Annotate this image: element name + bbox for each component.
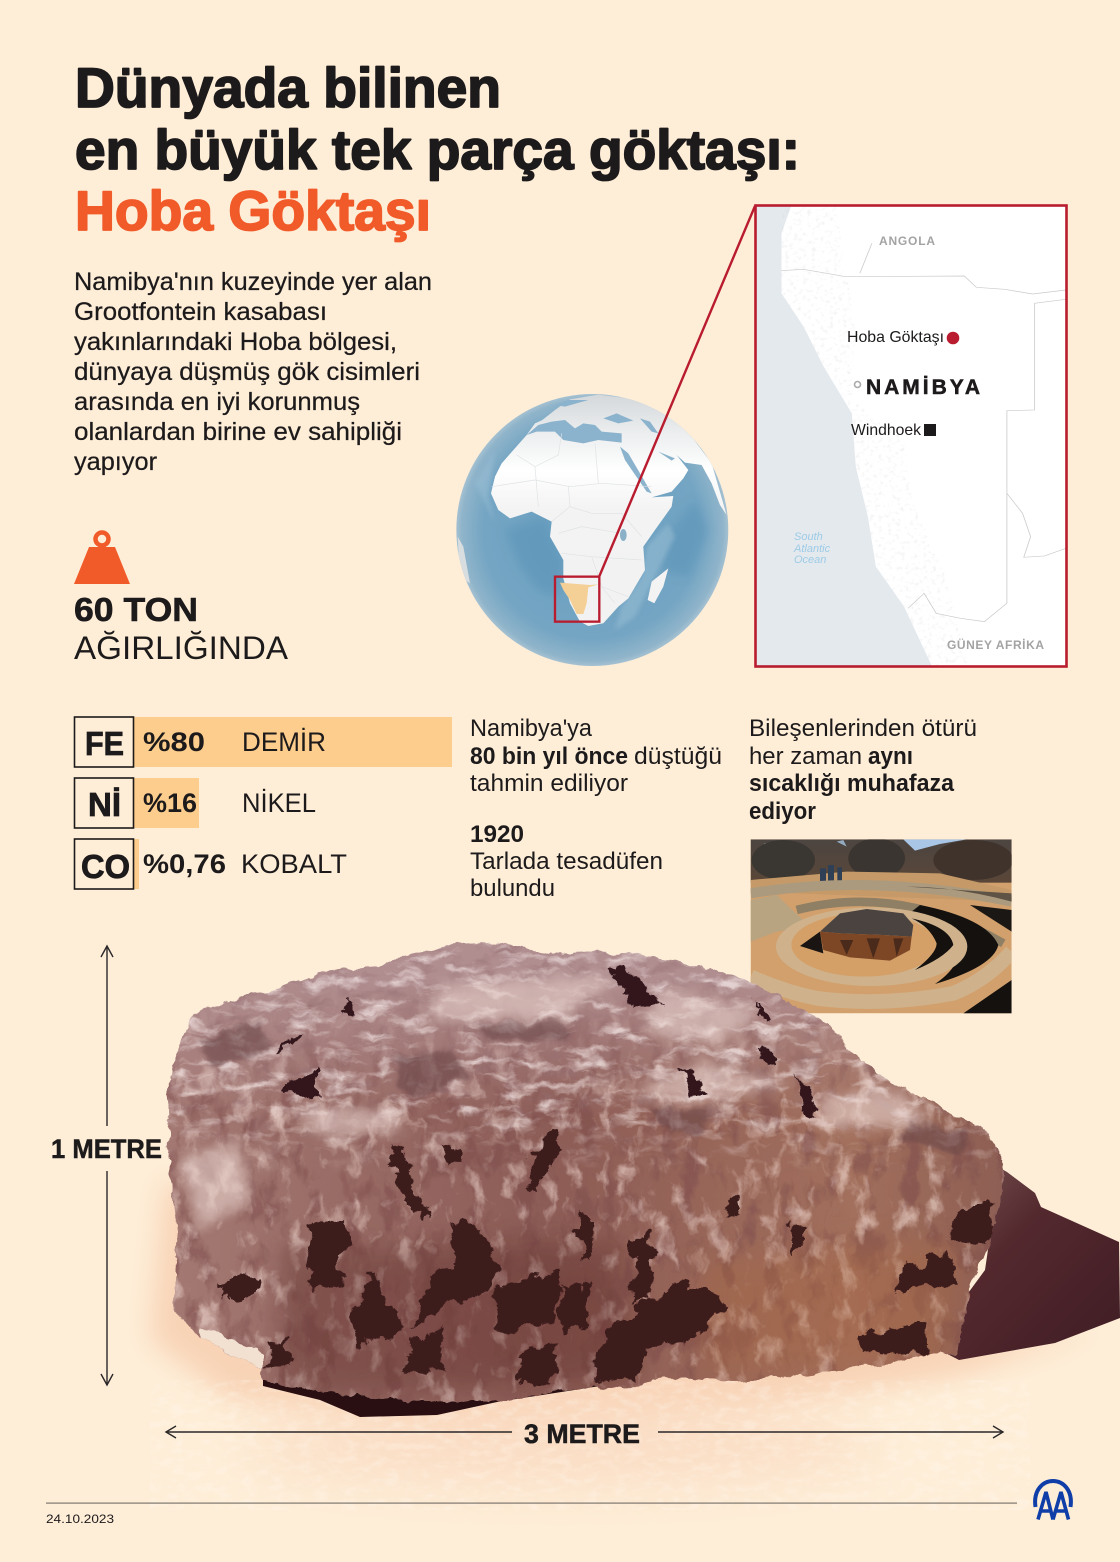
bottom right shadow (963, 980, 1012, 1013)
label: ocean: Atlantic (793, 543, 831, 555)
element box: Ni: Nİ (88, 786, 121, 823)
arrow: width (166, 1426, 1003, 1438)
intro text block: arasında en iyi korunmuş (74, 388, 360, 416)
intro text block: olanlardan birine ev sahipliği (74, 418, 402, 446)
text block: temperature: her zaman (749, 743, 862, 770)
title: Dünyada bilinen (75, 56, 501, 119)
meteorite (165, 942, 1004, 1404)
text block: fall date: Tarlada tesadüfen (470, 848, 663, 875)
date: 24.10.2023 (46, 1512, 114, 1526)
label: ocean (793, 531, 831, 566)
people (820, 865, 842, 882)
element box: CO: CO (81, 848, 130, 885)
inner sand (791, 913, 937, 977)
bright patches (180, 975, 930, 1230)
deep gashes (222, 1128, 990, 1385)
title (75, 56, 800, 242)
element box: FE (74, 717, 134, 767)
sea (755, 205, 932, 667)
bar: iron (133, 717, 452, 767)
text block: fall date: 80 bin yıl önce (470, 743, 628, 770)
steps (750, 895, 802, 942)
icon: weight (74, 532, 130, 584)
element box: CO (74, 839, 134, 889)
connector line (599, 206, 755, 577)
bar: nickel (133, 778, 199, 828)
label: 1 metre: 1 METRE (51, 1134, 162, 1164)
text block: fall date: bulundu (470, 875, 555, 902)
rock side tone (165, 996, 1004, 1404)
element names: DEMİR (242, 726, 326, 757)
intro text block (74, 268, 432, 476)
outer stone wall (751, 885, 1012, 902)
intro text block: dünyaya düşmüş gök cisimleri (74, 358, 420, 386)
dark contact shadow (263, 1370, 600, 1417)
stripe detail (200, 1327, 263, 1372)
shaded lower left (280, 1240, 640, 1400)
percentages: %80 (143, 727, 205, 757)
panel: map of Namibia (755, 205, 1066, 667)
borders (781, 243, 1066, 622)
Madagascar (648, 568, 668, 603)
composition bars (74, 717, 452, 889)
title: en büyük tek parça göktaşı: (75, 118, 800, 181)
arrow: height (101, 946, 113, 1385)
title: Hoba Göktaşı (75, 179, 431, 242)
marker: Windhoek (924, 424, 936, 436)
element names: NİKEL (242, 787, 316, 818)
mottled dark patches (200, 1020, 970, 1155)
label: Namibya: NAMİBYA (866, 376, 980, 399)
weight label: AĞIRLIĞINDA (74, 630, 289, 666)
seas (527, 400, 675, 493)
text block: temperature: aynı (868, 743, 913, 770)
intro text block: Grootfontein kasabası (74, 298, 327, 326)
South America edge (458, 537, 470, 583)
label: 3 metre: 3 METRE (524, 1419, 640, 1449)
intro text block: yapıyor (74, 448, 157, 476)
label: Angola: ANGOLA (879, 234, 935, 248)
element names: KOBALT (241, 849, 347, 879)
meteorite top (820, 909, 913, 937)
text block: fall date: düştüğü (634, 743, 722, 770)
label: Windhoek: Windhoek (851, 422, 922, 439)
trees (751, 839, 1012, 883)
warm lower right (700, 1240, 960, 1380)
top face streaks (166, 942, 998, 1170)
text block: temperature: sıcaklığı muhafaza (749, 770, 955, 797)
ocean shelf shading (475, 450, 675, 630)
text block: fall date: Namibya'ya (470, 715, 593, 742)
marker: Hoba (947, 332, 959, 344)
weight label (74, 591, 289, 666)
text block: temperature (749, 715, 977, 825)
element box: Ni (74, 778, 134, 828)
label: ocean: South (794, 531, 823, 543)
terrain texture (782, 208, 966, 662)
photo: meteorite site (751, 838, 1013, 1013)
text block: fall date (470, 715, 722, 902)
land: Africa and Eurasia (491, 395, 727, 626)
text block: temperature: ediyor (749, 798, 816, 825)
top cracks (273, 972, 820, 1120)
rock shadow on ground (930, 1168, 1120, 1360)
second stone wall (797, 902, 1003, 943)
meteorite side (820, 932, 912, 961)
intro text block: yakınlarındaki Hoba bölgesi, (74, 328, 397, 356)
ocean depth shading (509, 506, 708, 592)
rock shadow (800, 932, 823, 953)
icon: AA logo (1035, 1481, 1071, 1520)
locator box (555, 577, 599, 622)
inner trench (912, 918, 953, 970)
element names (241, 726, 347, 879)
text block: fall date: 1920 (470, 821, 524, 848)
outer paved ring (751, 952, 1012, 1002)
outer trench (912, 905, 998, 984)
Namibia highlight (560, 583, 598, 614)
middle paved ring (776, 907, 967, 986)
lake (620, 529, 627, 541)
side face texture (166, 1005, 1004, 1403)
percentages: %16 (143, 788, 197, 818)
intro text block: Namibya'nın kuzeyinde yer alan (74, 268, 432, 296)
sand ground (150, 1180, 1100, 1510)
label: Hoba: Hoba Göktaşı (847, 329, 944, 346)
percentages: %0,76 (143, 849, 226, 879)
country lines (492, 433, 652, 603)
rock top tone (165, 942, 1004, 1404)
footer rule (46, 1502, 1017, 1504)
globe (456, 394, 728, 666)
text block: temperature: Bileşenlerinden ötürü (749, 715, 977, 742)
text block: fall date: tahmin ediliyor (470, 770, 628, 797)
percentages (143, 727, 226, 879)
element box: FE: FE (85, 725, 124, 762)
label: ocean: Ocean (794, 554, 826, 566)
label: South Africa: GÜNEY AFRİKA (947, 637, 1044, 652)
weight label: 60 TON (74, 591, 198, 628)
marker: small town (854, 382, 860, 388)
bar: cobalt (133, 839, 139, 889)
